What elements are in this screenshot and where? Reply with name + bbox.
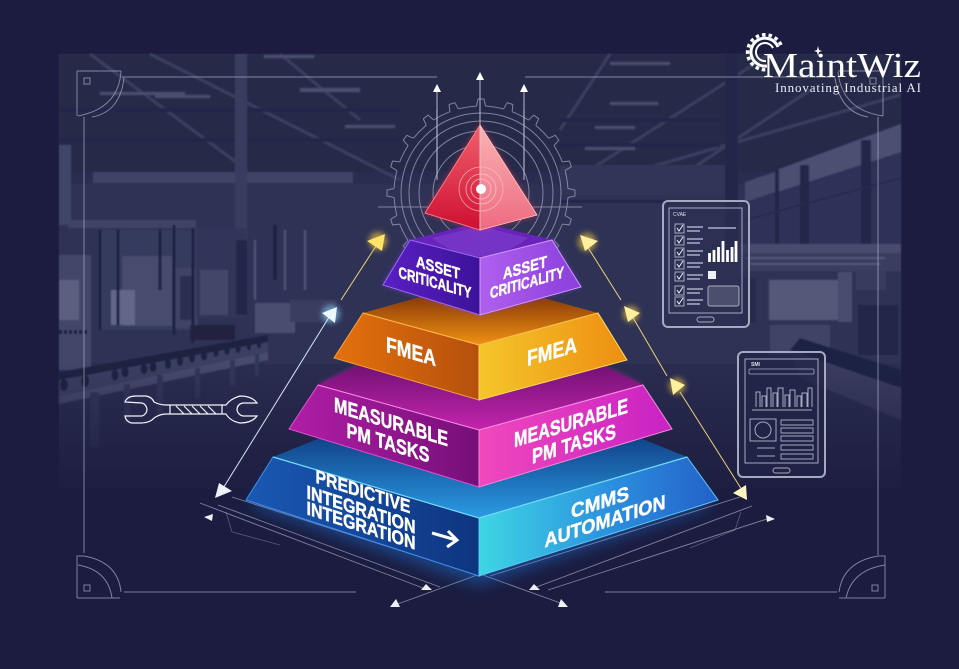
left face label second line: PM TASKS — [346, 419, 430, 468]
right face — [479, 385, 672, 487]
corner mark: bottom right — [839, 556, 885, 598]
tablet heading: SMI — [751, 362, 760, 368]
corner mark: bottom left — [77, 556, 121, 598]
list rows — [757, 420, 813, 459]
arrow: right middle yellow line — [623, 306, 667, 376]
background factory photo — [59, 54, 901, 529]
left face label second line: CRITICALITY — [398, 264, 472, 302]
tablet: checklist — [663, 201, 749, 327]
left face label: FMEA — [386, 332, 436, 371]
right face label: CMMS — [571, 482, 629, 523]
icon: logo gear — [748, 35, 781, 70]
icon: wrench — [125, 396, 257, 423]
right face label: ASSET — [503, 253, 547, 283]
checklist boxes — [675, 224, 684, 306]
ground lines and arrows under the pyramid — [200, 497, 775, 607]
check marks — [677, 225, 683, 304]
right face — [480, 125, 537, 230]
tier: measurable PM tasks — [289, 360, 672, 487]
tier: FMEA — [334, 297, 627, 400]
back wall — [59, 184, 901, 364]
right machines — [740, 244, 901, 253]
right face label second line: PM TASKS — [532, 420, 616, 469]
checklist rows — [687, 227, 736, 304]
top face — [363, 297, 598, 345]
gear outline behind apex — [378, 99, 582, 280]
right face label: MEASURABLE — [514, 394, 628, 452]
apex: red pyramid — [425, 125, 537, 230]
logo spark — [814, 46, 822, 56]
upward arrows above apex — [433, 72, 528, 180]
right face label second line: CRITICALITY — [490, 264, 564, 303]
right windows and wall — [738, 150, 901, 248]
arrow on left face — [432, 531, 457, 547]
left face label: ASSET — [416, 253, 460, 283]
left face — [425, 125, 480, 230]
right face — [479, 313, 627, 400]
tier: asset criticality — [383, 222, 581, 315]
bar chart — [756, 388, 812, 407]
right face label: FMEA — [527, 332, 577, 371]
logo wordmark: MaintWiz — [763, 46, 921, 85]
logo tagline: Innovating Industrial AI — [775, 80, 921, 95]
left face label: MEASURABLE — [334, 393, 448, 451]
right face — [479, 457, 718, 576]
corner mark: top right — [835, 71, 883, 117]
bar chart — [710, 241, 736, 262]
top face — [318, 360, 643, 430]
right face label second line: AUTOMATION — [544, 491, 666, 553]
left face label: PREDICTIVE — [316, 466, 410, 518]
mini checkbox — [708, 271, 716, 279]
tablet: dashboard — [738, 352, 825, 477]
tier: base, predictive integration and CMMS automation — [246, 430, 718, 585]
left face label third line: INTEGRATION — [307, 498, 415, 555]
blueprint frame — [77, 71, 878, 592]
arrow: left yellow line up — [341, 232, 387, 300]
top face — [273, 430, 687, 518]
left face — [383, 240, 480, 315]
top face — [410, 222, 552, 258]
left machines — [59, 255, 91, 370]
arrow: left white line up — [215, 305, 340, 498]
pie chart panel — [750, 419, 776, 441]
arrow: right upper yellow line — [578, 233, 621, 300]
left face — [289, 385, 479, 487]
center dot — [476, 184, 486, 194]
right face — [480, 240, 581, 315]
text panel — [708, 286, 739, 306]
left face label second line: INTEGRATION — [307, 482, 415, 539]
tablet heading: CVAE — [673, 212, 687, 218]
corner mark: top left — [77, 71, 124, 117]
left face — [246, 457, 479, 576]
left face — [334, 313, 479, 400]
logo: MaintWiz — [748, 35, 921, 95]
left conveyor — [59, 335, 268, 380]
arrow: right lower yellow line — [669, 378, 747, 500]
ceiling — [59, 54, 901, 172]
